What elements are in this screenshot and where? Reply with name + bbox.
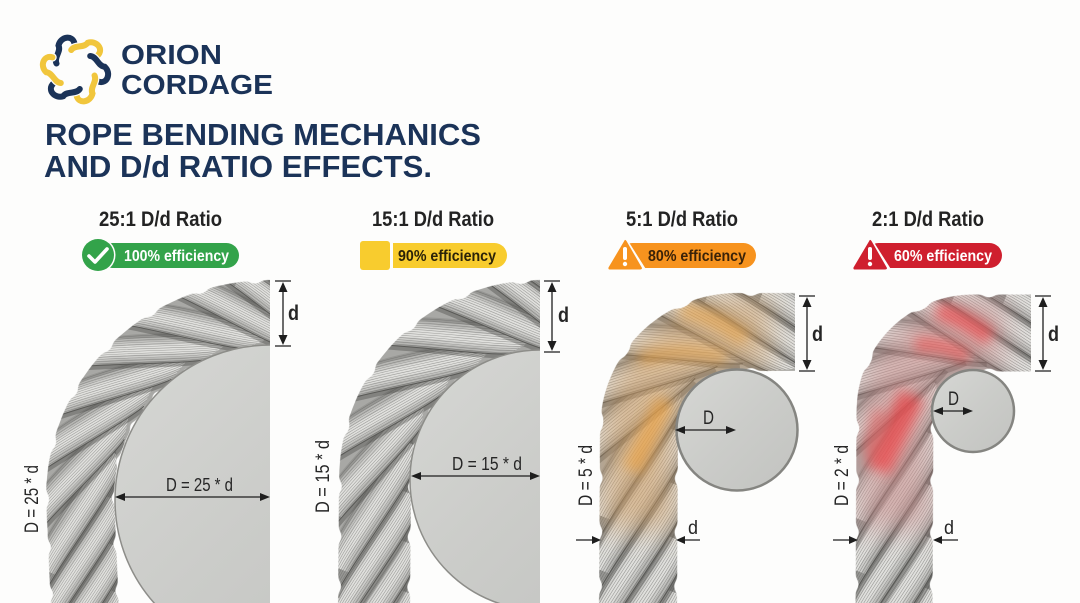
dimension: rope diameter d: d: [1048, 323, 1059, 346]
badge: 90% efficiency: [360, 241, 507, 270]
dimension: rope diameter d: [1035, 296, 1059, 371]
panel: 5:1 ratio: [576, 210, 822, 603]
badge: 90% efficiency: 90% efficiency: [398, 248, 496, 265]
sheave: large: [114, 344, 270, 603]
sheave: small: [676, 370, 798, 490]
brand name: ORION: [121, 39, 222, 70]
dimension: rope diameter d: d: [558, 304, 569, 327]
dimension: sheave radius D: [675, 408, 736, 434]
dimension: sheave radius D: D: [703, 408, 714, 429]
vertical label: D = 2 * d: D = 2 * d: [832, 445, 853, 506]
icon: Orion Cordage logo: [38, 37, 113, 102]
rope: tight bend with heat: [598, 292, 795, 603]
badge: 80% efficiency: 80% efficiency: [648, 248, 746, 265]
dimension: rope diameter d: d: [812, 323, 823, 346]
sheave: medium: [409, 350, 540, 603]
panel: 15:1 ratio: [315, 210, 568, 603]
badge: 60% efficiency: 60% efficiency: [894, 248, 992, 265]
heat overlay: red: [868, 310, 1005, 530]
vertical label: D = 25 * d: D = 25 * d: [22, 465, 43, 533]
heading: 15:1 D/d Ratio: 15:1 D/d Ratio: [372, 208, 494, 231]
heat overlay: orange: [632, 310, 770, 530]
brand name: CORDAGE: [121, 69, 273, 100]
heading: 25:1 D/d Ratio: 25:1 D/d Ratio: [99, 208, 222, 231]
dimension: sheave D = 25 * d: D = 25 * d: [166, 475, 233, 495]
dimension: sheave D = 25 * d: [115, 475, 270, 501]
dimension: rope width d: d: [688, 518, 698, 539]
badge: 100% efficiency: 100% efficiency: [124, 248, 229, 265]
heading: 2:1 D/d Ratio: 2:1 D/d Ratio: [872, 208, 984, 231]
title: AND D/d RATIO EFFECTS.: [44, 150, 432, 184]
vertical label: D = 15 * d: D = 15 * d: [313, 440, 334, 513]
dimension: sheave radius D: D: [948, 389, 959, 410]
dimension: rope diameter d: [544, 281, 569, 352]
dimension: sheave D = 15 * d: [411, 454, 540, 480]
dimension: sheave D = 15 * d: D = 15 * d: [452, 454, 522, 474]
dimension: rope diameter d: d: [288, 302, 299, 325]
dimension: rope diameter d: [799, 296, 823, 371]
badge: 80% efficiency: [603, 236, 756, 274]
panel: 2:1 ratio: [833, 210, 1058, 603]
title: ROPE BENDING MECHANICS: [45, 118, 481, 152]
rope: wide bend: [46, 280, 270, 603]
title: [44, 118, 481, 184]
vertical label: D = 5 * d: D = 5 * d: [576, 445, 597, 506]
dimension: rope width d: d: [944, 518, 954, 539]
dimension: sheave radius D: [933, 389, 973, 415]
badge: 60% efficiency: [848, 236, 1002, 274]
rope: severe bend with heat: [855, 294, 1031, 603]
brand name: [121, 39, 273, 100]
panel: 25:1 ratio: [24, 210, 298, 603]
badge: 100% efficiency: [80, 238, 239, 272]
dimension: rope width d: [576, 518, 700, 544]
dimension: rope diameter d: [275, 281, 299, 346]
heading: 5:1 D/d Ratio: 5:1 D/d Ratio: [626, 208, 738, 231]
dimension: rope width d: [833, 518, 958, 544]
rope: moderate bend: [338, 280, 540, 603]
sheave: smallest: [932, 370, 1014, 452]
